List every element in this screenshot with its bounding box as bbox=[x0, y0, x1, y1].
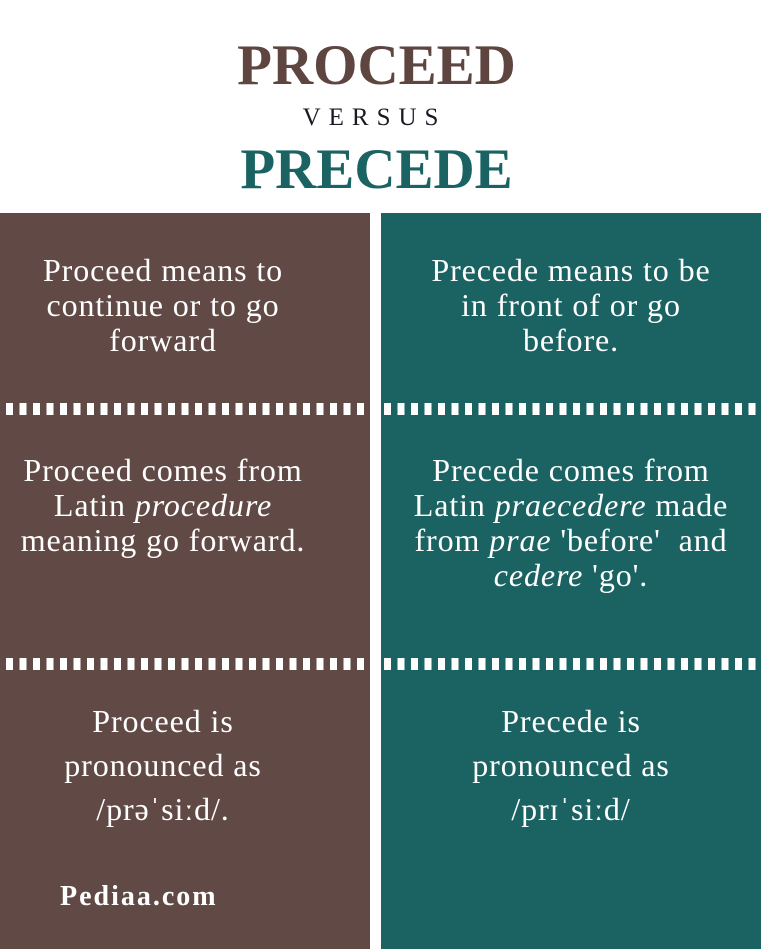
text: proceed origin: Latin procedure bbox=[54, 487, 272, 523]
text: precede origin: from prae 'before' and bbox=[414, 522, 728, 558]
panel: proceed bbox=[0, 213, 370, 949]
text: precede pronunciation: Precede is bbox=[501, 703, 641, 739]
text: proceed pronunciation: pronounced as bbox=[64, 747, 262, 783]
text: precede origin bbox=[414, 452, 728, 593]
text: proceed origin: meaning go forward. bbox=[21, 522, 305, 558]
subtitle: versus: VERSUS bbox=[303, 104, 446, 131]
text: proceed pronunciation: /prəˈsiːd/. bbox=[96, 791, 230, 827]
text: proceed origin: Proceed comes from bbox=[23, 452, 303, 488]
text: proceed meaning bbox=[43, 252, 283, 358]
text: precede pronunciation: pronounced as bbox=[472, 747, 670, 783]
text: proceed meaning: continue or to go bbox=[46, 287, 280, 323]
text: precede meaning bbox=[431, 252, 711, 358]
text: precede meaning: Precede means to be bbox=[431, 252, 711, 288]
text: proceed meaning: Proceed means to bbox=[43, 252, 283, 288]
text: proceed pronunciation: Proceed is bbox=[92, 703, 234, 739]
text: precede origin: Latin praecedere made bbox=[414, 487, 728, 523]
title: proceed: PROCEED bbox=[237, 34, 516, 97]
text: precede pronunciation bbox=[472, 703, 670, 827]
text: precede origin: Precede comes from bbox=[432, 452, 710, 488]
text: proceed origin bbox=[21, 452, 305, 558]
text: precede pronunciation: /prɪˈsiːd/ bbox=[511, 791, 631, 827]
text: precede meaning: in front of or go bbox=[461, 287, 681, 323]
panel: precede bbox=[381, 213, 761, 949]
text: precede origin: cedere 'go'. bbox=[494, 557, 648, 593]
text: proceed meaning: forward bbox=[109, 322, 217, 358]
text: precede meaning: before. bbox=[523, 322, 619, 358]
title: precede: PRECEDE bbox=[240, 138, 513, 201]
logo: pediaa.com: Pediaa.com bbox=[60, 881, 218, 912]
text: proceed pronunciation bbox=[64, 703, 262, 827]
